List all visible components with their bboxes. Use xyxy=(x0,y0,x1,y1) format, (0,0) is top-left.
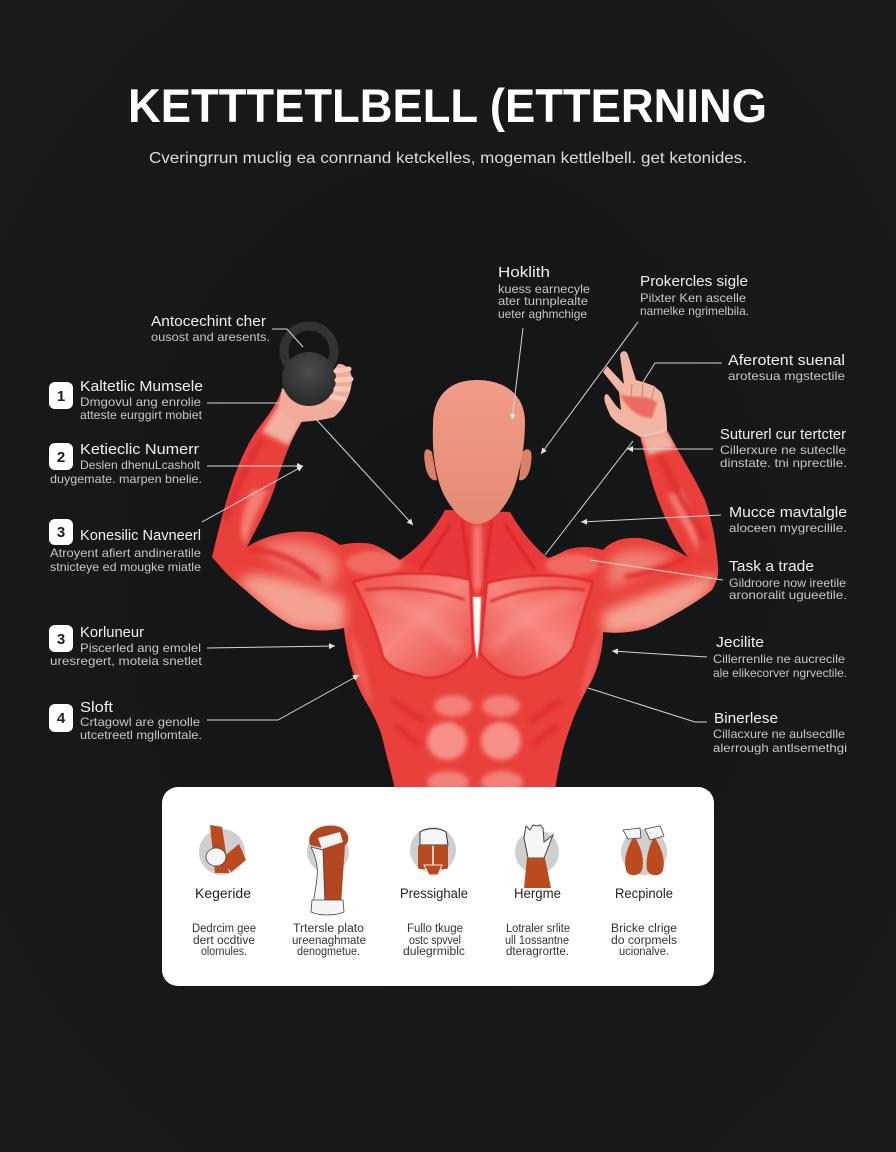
label: Suturerl cur tertcter xyxy=(720,426,847,470)
callout 3: stnicteye ed mougke miatle xyxy=(50,560,201,574)
callout 4 xyxy=(49,699,202,742)
abdominals xyxy=(392,692,561,787)
callout 1: 1 xyxy=(57,388,65,405)
exercise 2 xyxy=(292,826,366,958)
callout 3 second: 3 xyxy=(57,631,65,648)
label: Task a trade: aronoralit ugueetile. xyxy=(729,588,847,602)
label: Prokercles sigle: Prokercles sigle xyxy=(640,273,748,290)
callout 4: Sloft xyxy=(80,699,114,716)
exercise 1: Kegeride xyxy=(192,825,256,958)
exercise 5: Recpinole: ucionalve. xyxy=(619,946,669,958)
callout 4: 4 xyxy=(57,710,66,727)
callout 1 xyxy=(49,378,203,422)
label: Binerlese: Cillacxure ne aulsecdlle xyxy=(713,727,845,741)
left arm shading xyxy=(225,398,345,632)
callout 2: duygemate. marpen bnelie. xyxy=(50,472,202,486)
label: Mucce mavtalgle: Mucce mavtalgle xyxy=(729,504,847,521)
exercise 4: Hergme: Lotraler srlite xyxy=(506,923,570,935)
exercise 2: ureenaghmate xyxy=(292,935,366,947)
callout 3 second xyxy=(49,624,203,668)
right raised hand xyxy=(603,351,667,437)
exercise 3: Pressighale: Pressighale xyxy=(400,886,468,901)
left hand gripping xyxy=(278,364,352,422)
callout 1: atteste eurggirt mobiet xyxy=(80,408,203,422)
subtitle: Cveringrrun muclig ea conrnand ketckelles, mogeman kettlelbell. get ketonides. xyxy=(149,150,747,167)
label: Prokercles sigle xyxy=(640,273,749,318)
exercise 4: Hergme: Hergme xyxy=(514,886,561,901)
label: Task a trade: Gildroore now ireetile xyxy=(729,576,846,590)
title: KETTTETLBELL (ETTERNING xyxy=(128,79,767,132)
label: Task a trade xyxy=(729,558,847,602)
leader lines xyxy=(202,322,723,722)
label: Aferotent suenal: Aferotent suenal xyxy=(728,352,845,369)
exercise 1: Kegeride: Dedrcim gee xyxy=(192,923,256,935)
kettlebell xyxy=(282,326,336,406)
neck and trapezius xyxy=(405,510,545,600)
label: top left: ousost and aresents. xyxy=(151,330,270,344)
callout 2 xyxy=(49,441,202,486)
callout 2: Deslen dhenuLcasholt xyxy=(80,458,201,472)
panel: exercises xyxy=(162,787,714,986)
label: Binerlese xyxy=(713,710,847,755)
callout 3: Atroyent afiert andineratile xyxy=(50,546,201,560)
label: Binerlese: Binerlese xyxy=(714,710,778,727)
label: Hoklith: Hoklith xyxy=(498,264,550,281)
label: Mucce mavtalgle: aloceen mygrecilile. xyxy=(729,521,847,535)
exercise 5: Recpinole: do corpmels xyxy=(611,935,677,947)
callout 3 xyxy=(49,519,201,574)
label: Jecilite: Jecilite xyxy=(716,634,764,651)
label: Mucce mavtalgle xyxy=(729,504,847,535)
callout 1: Kaltetlic Mumsele xyxy=(80,378,203,395)
callout 3 second: Piscerled ang emolel xyxy=(80,641,201,655)
label: Task a trade: Task a trade xyxy=(729,558,814,575)
exercise 1: Kegeride: olornules. xyxy=(201,946,247,958)
head xyxy=(433,380,525,524)
exercise 4: Hergme: dteragrortte. xyxy=(506,946,569,958)
label: Hoklith: ater tunnplealte xyxy=(498,294,588,308)
callout 3: 3 xyxy=(57,524,65,541)
exercise 5: Recpinole xyxy=(611,826,677,958)
label: Hoklith xyxy=(498,264,590,321)
exercise 1: Kegeride: Kegeride xyxy=(195,886,251,901)
sternum highlight xyxy=(473,597,481,660)
exercise 5: Recpinole: Recpinole xyxy=(615,886,673,901)
callout 2: 2 xyxy=(57,449,65,466)
callout 4: utcetreetl mgllomtale. xyxy=(80,728,202,742)
label: Aferotent suenal: arotesua mgstectile xyxy=(728,369,845,383)
exercise 3: Pressighale: dulegrmiblc xyxy=(403,946,465,958)
exercise 3: Pressighale xyxy=(400,827,468,958)
label: Aferotent suenal xyxy=(728,352,845,383)
label: Jecilite: Cillerrenlie ne aucrecile xyxy=(713,652,845,666)
label: Prokercles sigle: Pilxter Ken ascelle xyxy=(640,291,746,305)
infographic canvas xyxy=(49,88,846,986)
label: Suturerl cur tertcter: Suturerl cur tertcter xyxy=(720,426,846,443)
label: Hoklith: kuess earnecyle xyxy=(498,282,590,296)
exercise 4: Hergme xyxy=(505,825,570,958)
deltoids xyxy=(346,551,598,576)
label: Suturerl cur tertcter: dinstate. tni nprectile. xyxy=(720,456,847,470)
callout 3: Konesilic Navneerl xyxy=(80,527,201,544)
gripping fingers xyxy=(332,369,351,399)
exercise 3: Pressighale: ostc spvvel xyxy=(409,935,461,947)
label: Suturerl cur tertcter: Cillerxure ne suteclle xyxy=(720,443,846,457)
right pectoral xyxy=(480,576,593,678)
lats xyxy=(350,632,600,705)
label: top left: Antocechint cher xyxy=(151,313,266,330)
right arm shading xyxy=(603,430,715,635)
label: Jecilite xyxy=(713,634,847,680)
label: Binerlese: alerrough antlsemethgi xyxy=(713,741,847,755)
exercise 2: denogmetue. xyxy=(297,946,360,958)
left pectoral xyxy=(353,574,473,678)
exercise 1: Kegeride: dert ocdtive xyxy=(193,935,255,947)
exercise 3: Pressighale: Fullo tkuge xyxy=(407,923,463,935)
callout 2: Ketieclic Numerr xyxy=(80,441,199,458)
callout 1: Dmgovul ang enrolie xyxy=(80,395,201,409)
exercise 2: Trtersle plato xyxy=(293,923,364,935)
label: top left xyxy=(151,313,270,344)
muscular figure xyxy=(200,326,730,800)
callout 3 second: uresregert, moteia snetlet xyxy=(50,654,203,668)
label: Prokercles sigle: namelke ngrimelbila. xyxy=(640,304,749,318)
exercise 5: Recpinole: Bricke clrige xyxy=(611,923,677,935)
callout 3 second: Korluneur xyxy=(80,624,144,641)
label: Hoklith: ueter aghmchige xyxy=(498,307,587,321)
callout 4: Crtagowl are genolle xyxy=(80,715,200,729)
ears xyxy=(424,449,532,480)
label: Jecilite: ale elikecorver ngrvectile. xyxy=(713,666,847,680)
exercise 4: Hergme: ull 1ossantne xyxy=(505,935,569,947)
torso and arms musculature xyxy=(212,392,718,787)
